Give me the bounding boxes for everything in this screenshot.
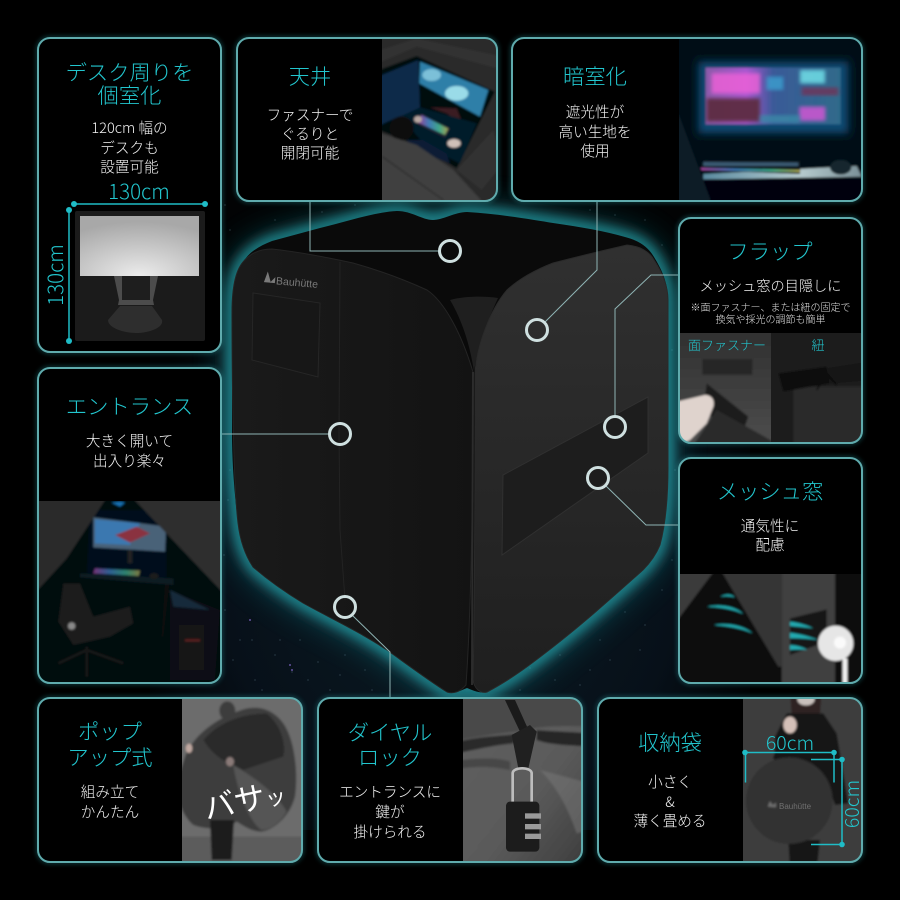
heading: pop-up: ポップ bbox=[78, 715, 142, 746]
side fabric bbox=[679, 114, 711, 200]
heading: mesh window: メッシュ窓 bbox=[717, 475, 823, 506]
tent: Bauhütte logo bbox=[264, 271, 319, 291]
heading: ceiling: 天井 bbox=[289, 60, 331, 91]
heading: blackout: 暗室化 bbox=[563, 60, 627, 91]
text: 120cm desk: 120cm 幅の bbox=[91, 117, 168, 138]
text: 120cm desk bbox=[91, 117, 168, 177]
text: entrance description bbox=[86, 430, 173, 471]
dimension: bag width 60cm bbox=[742, 727, 837, 782]
dimension: bag height 60cm bbox=[811, 757, 865, 847]
text: mesh window description: 通気性に bbox=[741, 515, 799, 536]
text: storage bag description: 小さく bbox=[648, 771, 692, 792]
tent: Bauhütte logo: Bauhütte bbox=[276, 275, 319, 291]
tent: right face bbox=[473, 245, 668, 692]
text: pop-up description: 組み立て bbox=[81, 781, 139, 802]
text: ceiling description: ファスナーで bbox=[267, 104, 353, 125]
tent: left face bbox=[232, 249, 473, 693]
photo: dark room with glowing monitor bbox=[679, 39, 861, 200]
callout marker: ceiling bbox=[440, 240, 460, 262]
dimension: depth 130cm bbox=[39, 207, 72, 344]
heading: pop-up: アップ式 bbox=[67, 741, 153, 772]
text: 120cm desk: デスクも bbox=[100, 137, 159, 158]
dimension: depth 130cm: 130cm bbox=[39, 244, 69, 306]
keyboard bbox=[700, 161, 801, 174]
dimension: width 130cm bbox=[71, 175, 208, 207]
callout marker: entrance bbox=[330, 424, 350, 444]
text: storage bag description: & bbox=[665, 791, 675, 812]
mouse bbox=[830, 160, 851, 175]
panel: blackout bbox=[512, 30, 870, 210]
tent glow bbox=[232, 211, 668, 693]
text: mesh window description bbox=[741, 515, 799, 555]
panel: mesh window bbox=[670, 458, 870, 690]
text: entrance description: 出入り楽々 bbox=[93, 450, 166, 471]
heading: storage bag: 収納袋 bbox=[638, 726, 702, 757]
panel: pop-up bbox=[38, 690, 310, 870]
note: flap adjustment bbox=[691, 299, 850, 326]
text: ceiling description bbox=[267, 104, 353, 163]
airflow arrows right bbox=[790, 622, 818, 650]
text: dial lock description: 鍵が bbox=[375, 801, 405, 822]
panel: entrance bbox=[30, 368, 230, 690]
callout marker: mesh window bbox=[588, 468, 608, 488]
text: storage bag description bbox=[634, 771, 706, 831]
dimension: width 130cm: 130cm bbox=[108, 175, 170, 205]
text: blackout description: 高い生地を bbox=[559, 121, 631, 142]
text: dial lock description: 掛けられる bbox=[354, 821, 426, 842]
desk highlight bbox=[703, 166, 862, 179]
panel: ceiling bbox=[237, 30, 503, 210]
text: ceiling description: ぐるりと bbox=[281, 123, 339, 144]
photo: string tie bbox=[771, 333, 861, 442]
label: string: 紐 bbox=[811, 335, 825, 354]
label: basa sound effect: バサッ bbox=[199, 767, 289, 828]
diagram: top view of desk and chair bbox=[75, 211, 205, 341]
dimension: bag width 60cm: 60cm bbox=[766, 727, 814, 756]
heading: dial lock bbox=[348, 716, 432, 772]
photo: hook and loop fastener bbox=[680, 333, 771, 442]
heading: flap: フラップ bbox=[727, 235, 813, 266]
text: blackout description: 使用 bbox=[580, 140, 610, 161]
pop-up tent product bbox=[232, 211, 668, 693]
heading: dial lock: ダイヤル bbox=[348, 716, 432, 747]
photo: open entrance with gaming desk bbox=[39, 501, 220, 682]
photo: desk seen from above bbox=[382, 39, 496, 200]
panel: flap bbox=[670, 218, 870, 450]
tent: corner seam bbox=[472, 372, 473, 685]
tent: left mesh window bbox=[252, 293, 320, 377]
text: pop-up description: かんたん bbox=[81, 801, 139, 822]
heading: pop-up bbox=[67, 715, 153, 772]
photo: airflow through mesh window bbox=[680, 574, 861, 682]
monitor glow bbox=[698, 62, 848, 133]
callout marker: blackout bbox=[526, 320, 548, 340]
text: blackout description: 遮光性が bbox=[566, 101, 625, 122]
text: entrance description: 大きく開いて bbox=[86, 430, 173, 451]
tent: right mesh window bbox=[502, 397, 648, 555]
text: 120cm desk: 設置可能 bbox=[100, 156, 159, 177]
note: flap adjustment: ※面ファスナー、または紐の固定で bbox=[691, 299, 850, 314]
callout marker: dial lock bbox=[334, 596, 356, 618]
photo: padlock on zipper bbox=[463, 699, 581, 861]
text: blackout description bbox=[559, 101, 631, 161]
photo: person holding storage bag bbox=[743, 699, 861, 861]
dimension: bag height 60cm: 60cm bbox=[836, 780, 865, 828]
tent: inner corner opening bbox=[450, 297, 498, 372]
heading: dial lock: ロック bbox=[358, 741, 422, 772]
fan bbox=[818, 626, 853, 690]
text: mesh window description: 配慮 bbox=[755, 534, 785, 555]
tent: entrance zipper seam bbox=[339, 262, 345, 600]
text: dial lock description bbox=[339, 781, 441, 842]
airflow arrows left bbox=[707, 594, 753, 633]
heading: entrance: エントランス bbox=[66, 390, 193, 421]
callout leader lines bbox=[221, 201, 679, 698]
text: dial lock description: エントランスに bbox=[339, 781, 441, 802]
panel: desk private room bbox=[38, 38, 221, 352]
heading: desk private room: 個室化 bbox=[98, 79, 161, 110]
panel: dial lock bbox=[318, 690, 590, 870]
label: hook and loop: 面ファスナー bbox=[688, 335, 766, 354]
heading: desk private room: デスク周りを bbox=[66, 56, 193, 87]
text: ceiling description: 開閉可能 bbox=[281, 142, 340, 163]
bag logo: Bauhütte bbox=[779, 802, 812, 811]
text: flap description: メッシュ窓の目隠しに bbox=[700, 276, 841, 296]
heading: desk private room bbox=[66, 56, 193, 110]
photo: person opening tent bbox=[182, 699, 301, 861]
text: pop-up description bbox=[81, 781, 139, 822]
text: storage bag description: 薄く畳める bbox=[634, 810, 706, 831]
callout marker: flap bbox=[604, 416, 626, 438]
note: flap adjustment: 換気や採光の調節も簡単 bbox=[716, 311, 826, 326]
panel: storage bag bbox=[598, 690, 870, 870]
